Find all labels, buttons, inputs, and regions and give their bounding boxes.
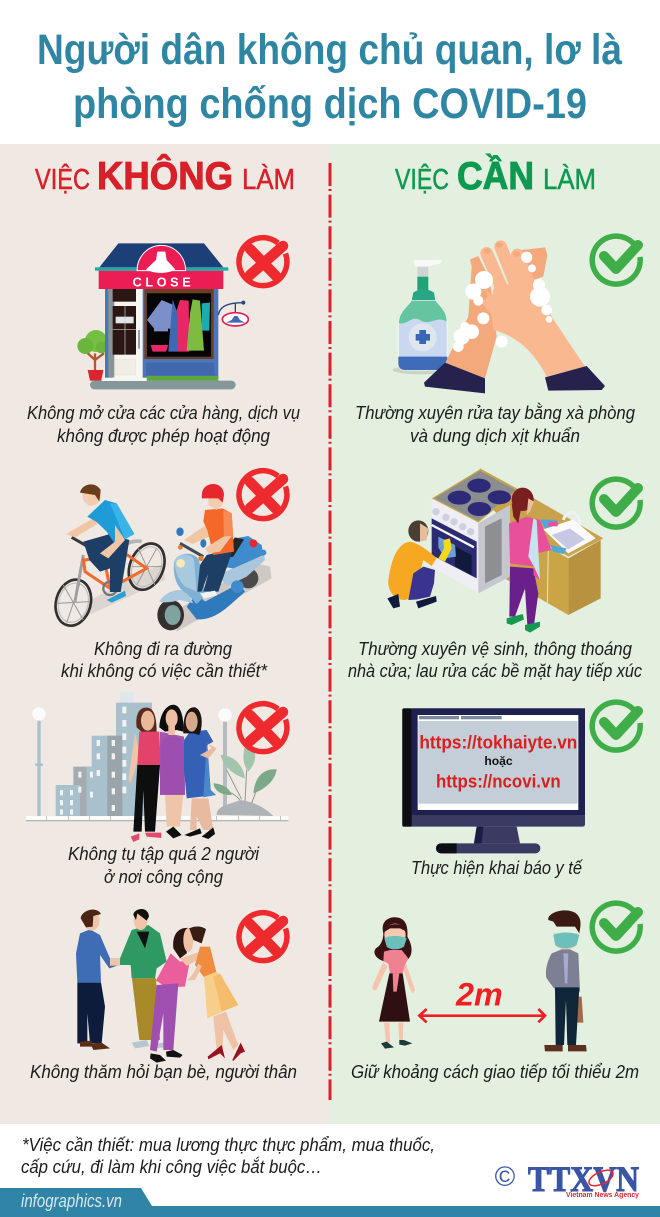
caption: health declaration: Thực hiện khai báo y tế xyxy=(411,857,584,878)
logo: TTXVN: © xyxy=(495,1161,516,1192)
divider: dashed centre line xyxy=(328,163,332,1100)
icon: check 4 xyxy=(592,903,640,951)
footnote: *Việc cần thiết: mua lương thực thực phẩm, mua thuốc, xyxy=(22,1135,435,1155)
caption: going out: Không đi ra đường xyxy=(94,638,233,659)
heading: việc không làm: VIỆC xyxy=(35,163,90,196)
heading: việc cần làm: VIỆC xyxy=(395,163,449,196)
title xyxy=(37,26,623,128)
heading: việc cần làm: CẦN xyxy=(457,154,534,198)
icon: cross 1 xyxy=(239,238,287,286)
icon: check 3 xyxy=(592,702,640,750)
caption: hand washing: và dung dịch xịt khuẩn xyxy=(410,425,580,446)
illustration: closed shop: CLOSE xyxy=(133,276,191,290)
illustration: cleaning the kitchen xyxy=(387,468,603,633)
illustration: computer monitor with health declaration sites xyxy=(402,708,585,853)
illustration: hand washing and sanitiser xyxy=(393,242,605,393)
caption: gathering: ở nơi công cộng xyxy=(104,866,224,887)
caption: visiting: Không thăm hỏi bạn bè, người thân xyxy=(30,1061,297,1082)
illustration: group of women in the city xyxy=(26,692,288,842)
caption: cleaning: Thường xuyên vệ sinh, thông thoáng xyxy=(358,638,633,659)
logo: TTXVN: TTXVN xyxy=(528,1159,639,1199)
caption: distancing: Giữ khoảng cách giao tiếp tối thiểu 2m xyxy=(351,1061,639,1082)
caption: cleaning xyxy=(348,638,643,681)
heading: việc không làm: LÀM xyxy=(242,163,295,196)
icon: cross 4 xyxy=(239,913,287,961)
illustration: cycling and scooter xyxy=(51,484,272,632)
caption: going out xyxy=(61,638,268,681)
footer bar: infographics.vn xyxy=(21,1191,122,1211)
caption: hand washing: Thường xuyên rửa tay bằng xà phòng xyxy=(355,402,636,423)
illustration: closed shop xyxy=(77,243,248,389)
panel: things to do xyxy=(330,144,660,1124)
footnote xyxy=(21,1135,435,1177)
illustration: two people keeping 2m apart: 2m xyxy=(455,977,503,1013)
title: phòng chống dịch COVID-19 xyxy=(73,80,587,128)
illustration: computer monitor with health declaration sites: https://tokhaiyte.vn xyxy=(419,731,577,752)
heading: việc không làm xyxy=(35,153,295,198)
logo: TTXVN: Vietnam News Agency xyxy=(566,1190,640,1199)
illustration: computer monitor with health declaration sites: hoặc xyxy=(484,754,513,768)
heading: việc cần làm: LÀM xyxy=(543,163,596,196)
icon: check 1 xyxy=(592,236,640,284)
footnote: cấp cứu, đi làm khi công việc bắt buộc… xyxy=(21,1157,322,1177)
caption: shop xyxy=(27,402,300,446)
heading: việc không làm: KHÔNG xyxy=(97,153,233,198)
heading: việc cần làm xyxy=(395,154,596,198)
icon: check 2 xyxy=(592,479,640,527)
panel: things not to do xyxy=(0,144,330,1124)
illustration: visiting friends xyxy=(76,909,245,1063)
caption: shop: không được phép hoạt động xyxy=(57,425,271,446)
caption: shop: Không mở cửa các cửa hàng, dịch vụ xyxy=(27,402,300,423)
illustration: computer monitor with health declaration sites: https://ncovi.vn xyxy=(436,771,561,792)
caption: gathering xyxy=(68,843,260,887)
icon: cross 2 xyxy=(239,471,287,519)
caption: hand washing xyxy=(355,402,636,446)
caption: going out: khi không có việc cần thiết* xyxy=(61,660,268,681)
icon: cross 3 xyxy=(239,704,287,752)
footer bar xyxy=(0,1188,660,1217)
illustration: two people keeping 2m apart xyxy=(372,910,587,1051)
caption: gathering: Không tụ tập quá 2 người xyxy=(68,843,260,864)
